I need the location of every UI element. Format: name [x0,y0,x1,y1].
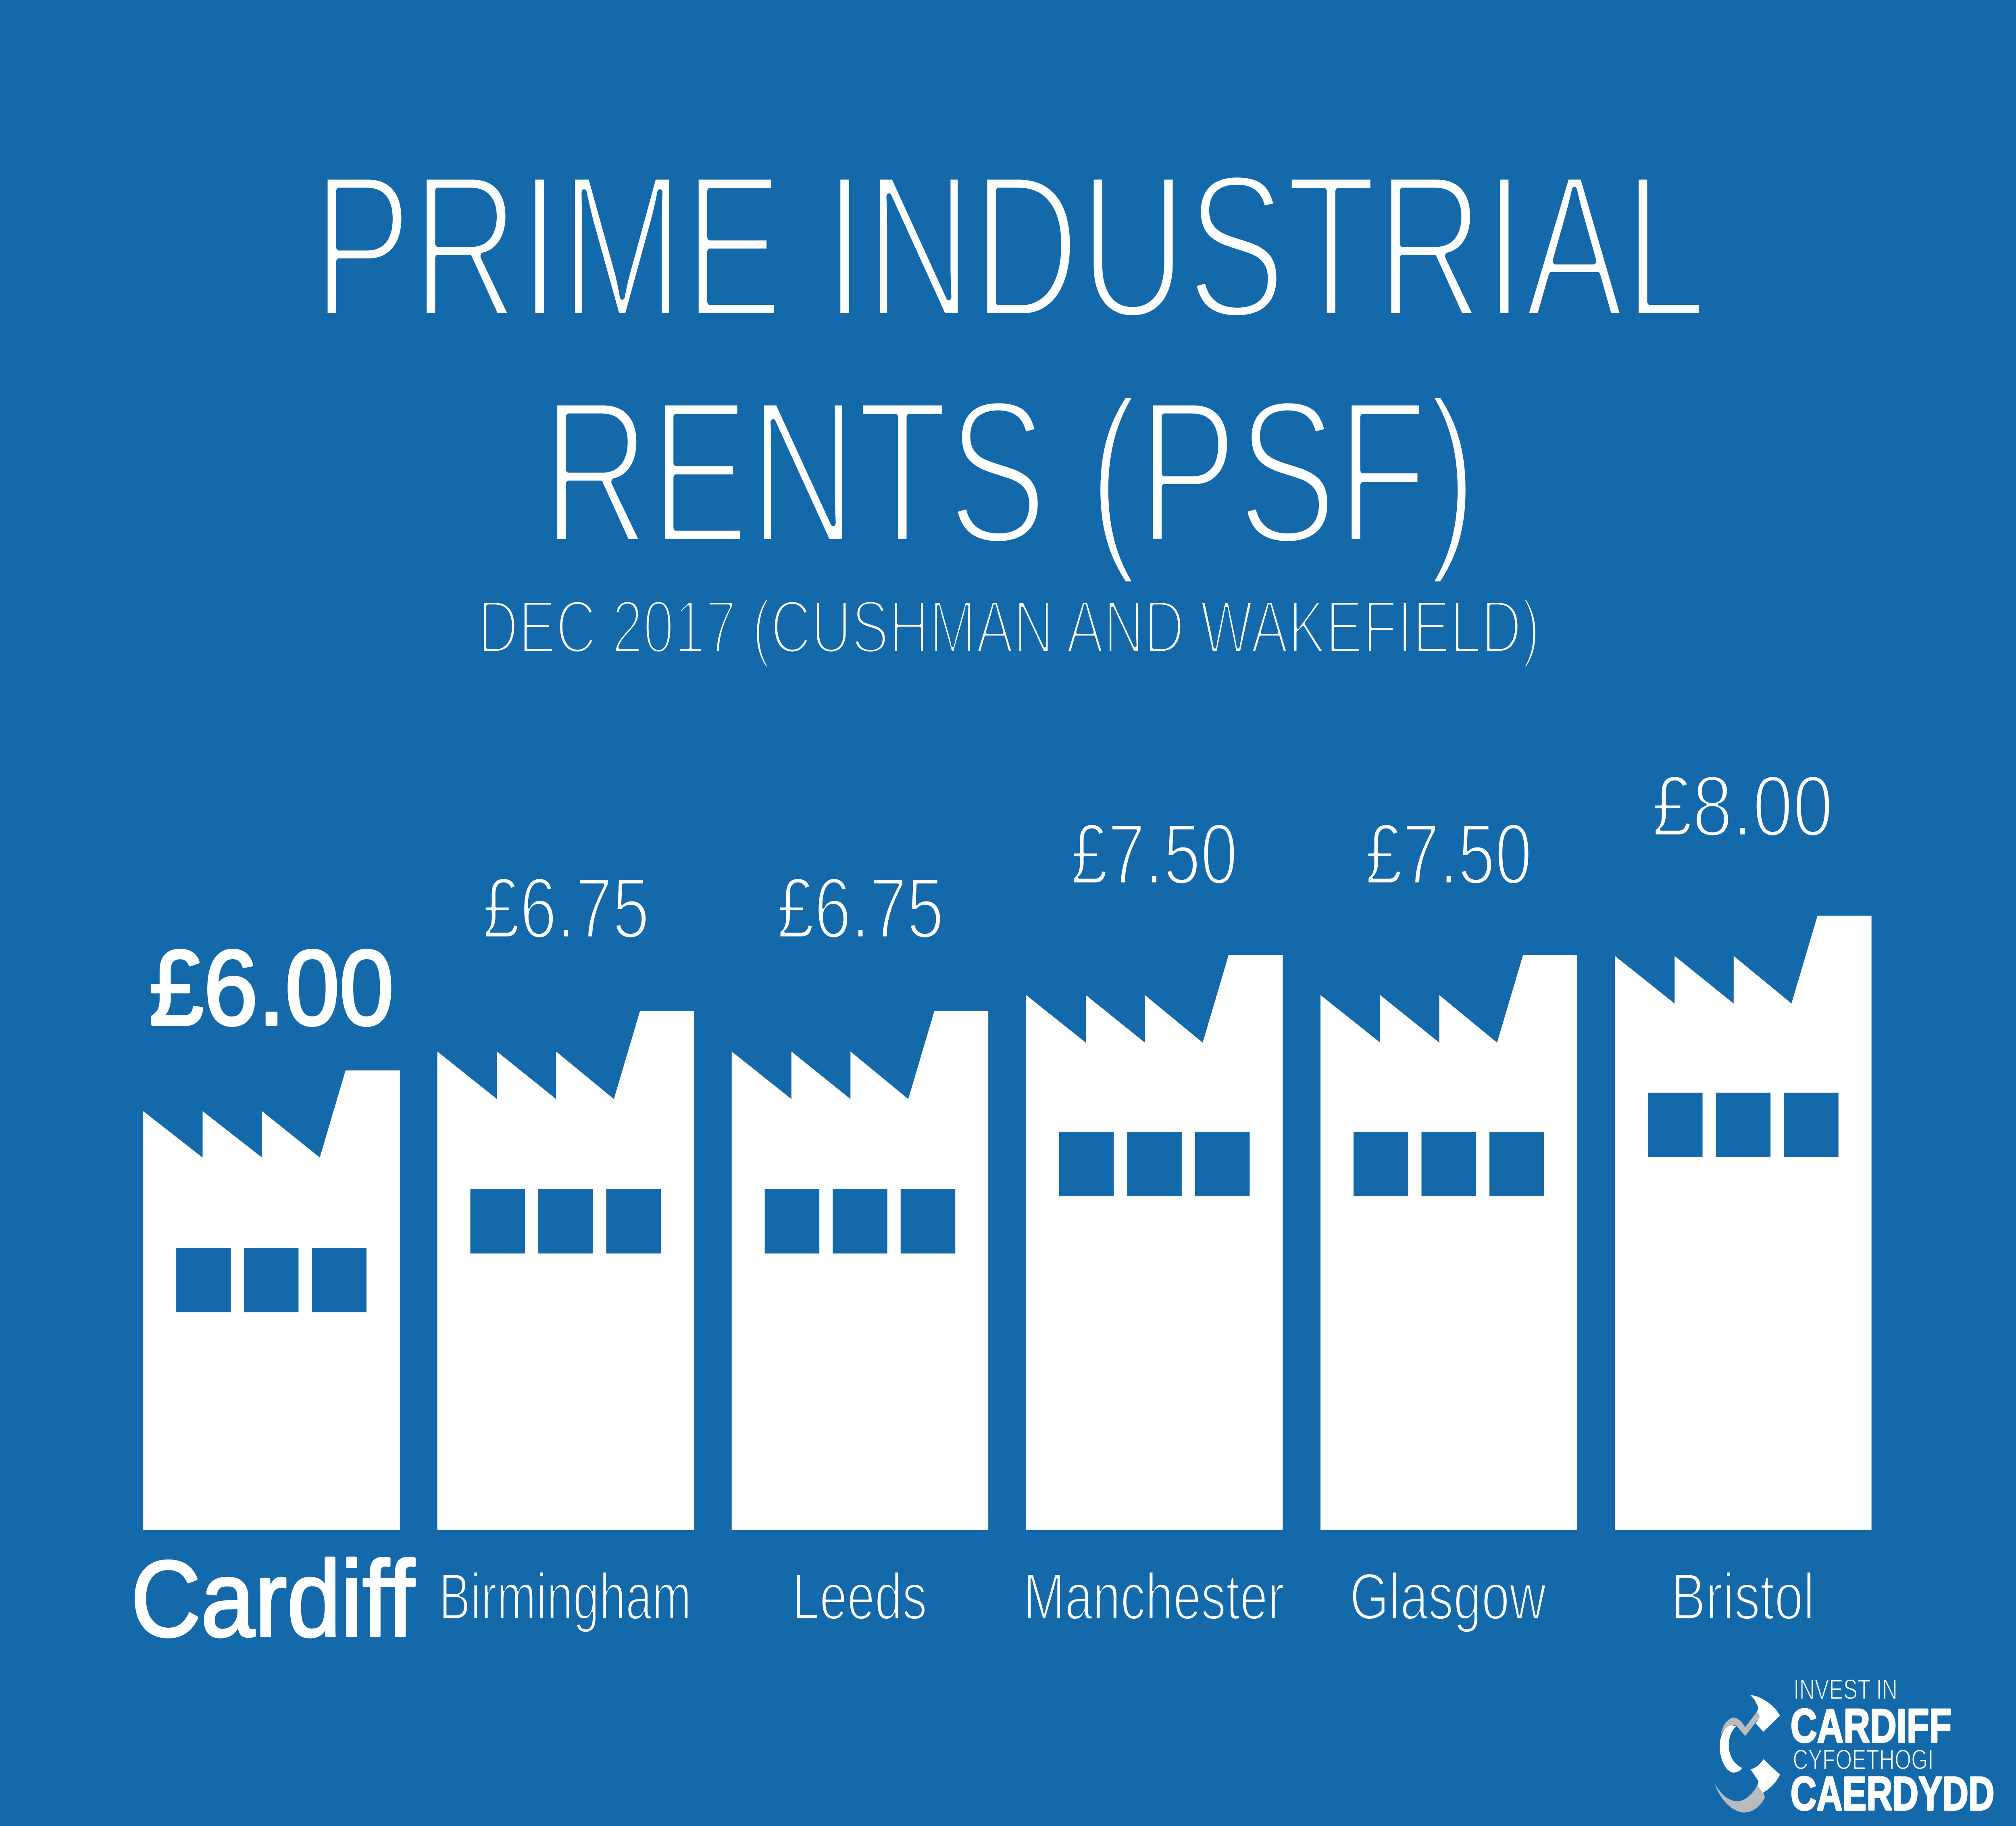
panel: Bristol [1615,758,1872,1634]
value: Birmingham rent: £6.75 [483,860,650,956]
panel: Manchester [1023,806,1284,1634]
logo text: CARDIFF [1791,1699,1951,1753]
value: Bristol rent: £8.00 [1652,758,1833,854]
icon: factory Glasgow [1320,955,1577,1530]
logo text: CYFOETHOGI [1793,1744,1934,1776]
panel: Glasgow [1320,806,1577,1634]
panel: Leeds [732,860,988,1634]
subtitle: DEC 2017 (CUSHMAN AND WAKEFIELD) [478,585,1540,669]
panel: Birmingham [437,860,694,1634]
icon: factory Manchester [1026,955,1283,1530]
icon: factory Leeds [732,1011,988,1530]
value: Leeds rent: £6.75 [777,860,944,956]
label: Cardiff: Cardiff [131,1539,415,1659]
icon: factory Bristol [1615,916,1872,1530]
title: RENTS (PSF) [542,357,1477,587]
logo text: INVEST IN [1793,1674,1897,1705]
panel: Cardiff [131,929,415,1659]
label: Leeds: Leeds [792,1560,927,1634]
value: Manchester rent: £7.50 [1071,806,1237,902]
title [313,131,1706,587]
icon: factory Cardiff [143,1070,400,1530]
logo text [1791,1674,1994,1820]
label: Glasgow: Glasgow [1350,1560,1546,1634]
label: Manchester: Manchester [1023,1560,1284,1634]
icon: factory Birmingham [437,1011,694,1530]
value: Cardiff rent: £6.00 [149,929,394,1047]
label: Bristol: Bristol [1671,1560,1815,1634]
value: Glasgow rent: £7.50 [1365,806,1532,902]
icon: logo symbol [1714,1695,1780,1813]
title: PRIME INDUSTRIAL [313,131,1706,360]
logo text: CAERDYDD [1791,1767,1994,1820]
logo: Invest in Cardiff [1714,1674,1994,1820]
label: Birmingham: Birmingham [439,1560,691,1634]
